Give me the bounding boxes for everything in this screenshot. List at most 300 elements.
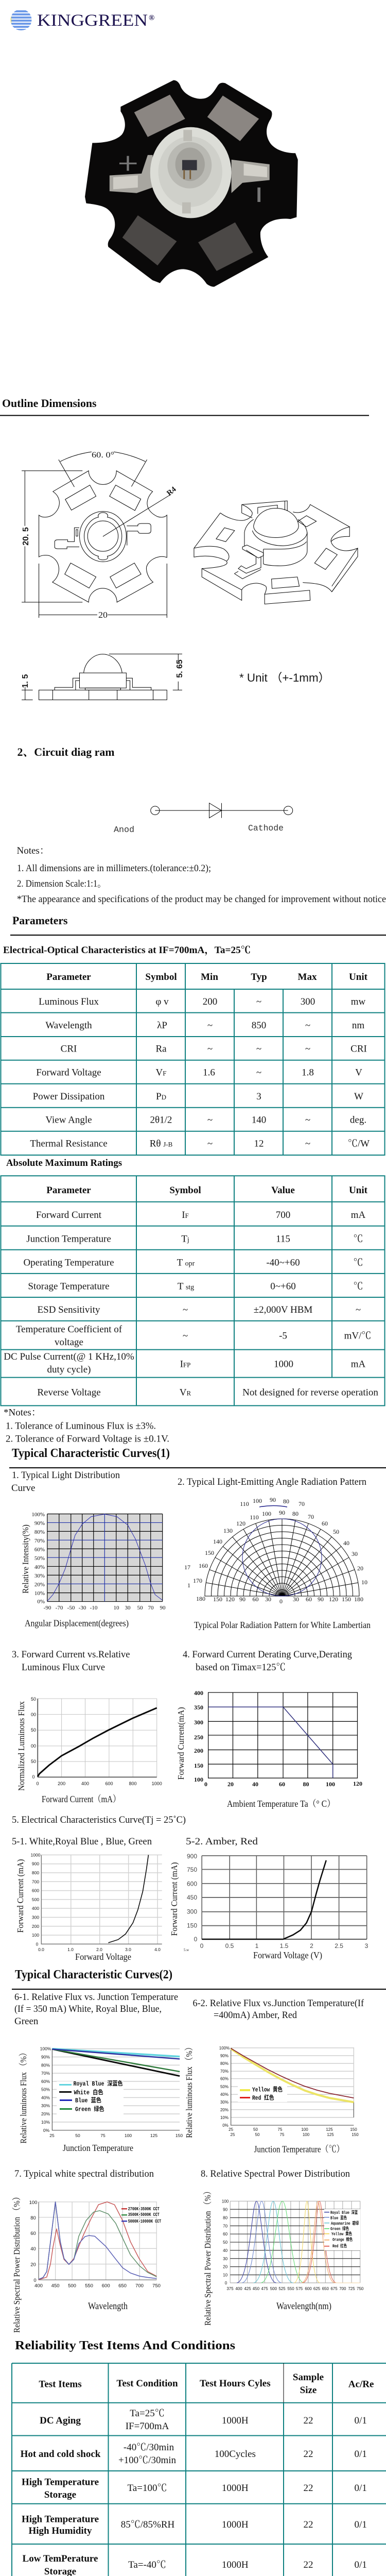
- angle labels: 60: [252, 1596, 258, 1603]
- data rows: 200: [203, 996, 217, 1007]
- data rows: Ta=100℃: [128, 2483, 167, 2494]
- axis labels: 125: [150, 2133, 157, 2138]
- axis labels: 100: [32, 1933, 39, 1938]
- axis labels: 1: [255, 1942, 259, 1950]
- axis labels: 80: [223, 2215, 228, 2221]
- axis labels: 0%: [43, 2128, 50, 2133]
- data rows: ~: [256, 1044, 261, 1055]
- axis labels: 0: [204, 1781, 207, 1788]
- legend: [57, 2079, 124, 2114]
- axis labels: 400: [235, 2286, 242, 2291]
- table: absolute maximum ratings: [1, 1176, 385, 1405]
- header row: Parameter: [46, 972, 91, 982]
- axis labels: 300: [187, 1908, 197, 1916]
- angle labels: 30: [352, 1550, 358, 1557]
- angle labels: 10: [361, 1579, 367, 1586]
- axis labels: 80%: [41, 2062, 50, 2067]
- axis labels: 10: [113, 1605, 119, 1611]
- subheading: absolute maximum ratings: Absolute Maximum Ratings: [6, 1158, 122, 1168]
- title: 7. Typical white spectral distribution: [14, 2168, 154, 2179]
- axis labels: 80%: [34, 1529, 45, 1535]
- axis labels: 0%: [222, 2123, 229, 2128]
- angle labels: 60: [322, 1520, 328, 1527]
- axis labels: 750: [152, 2283, 161, 2289]
- data rows: High Temperature: [22, 2514, 99, 2524]
- axis labels: 100: [125, 2133, 132, 2138]
- title: 4. Forward Current Derating Curve,Derating: [183, 1649, 352, 1660]
- panel: 4 derating curve: [176, 1649, 362, 1809]
- axis labels: 100%: [31, 1512, 45, 1518]
- data rows: View Angle: [45, 1115, 92, 1126]
- polar chart: [205, 1505, 359, 1596]
- axis labels: 1000: [31, 1853, 41, 1858]
- axis labels: 125: [326, 2127, 333, 2132]
- axis labels: 30: [223, 2257, 228, 2261]
- data rows: IF=700mA: [126, 2421, 169, 2432]
- data rows: +100℃/30min: [118, 2455, 177, 2466]
- data rows: ~: [356, 1304, 361, 1315]
- title: based on Timax=125℃: [196, 1662, 286, 1673]
- axis labels: 500: [270, 2286, 277, 2291]
- data rows: ~: [305, 1044, 310, 1055]
- axis labels: 400: [81, 1781, 89, 1786]
- axis labels: 150: [350, 2127, 357, 2132]
- data rows: 2θ1/2: [150, 1115, 172, 1126]
- axis labels: 2: [310, 1942, 313, 1950]
- technical drawing: top view: [22, 451, 178, 620]
- axis labels: 70%: [220, 2069, 229, 2074]
- data rows: φ v: [155, 996, 169, 1007]
- registered mark: ®: [149, 14, 154, 22]
- axis labels: 2.0: [96, 1947, 102, 1952]
- axis labels: 250: [194, 1734, 203, 1741]
- data rows: ~: [183, 1304, 188, 1315]
- data rows: PD: [156, 1091, 166, 1102]
- panel: 6-2 relative flux amber red: [184, 1998, 364, 2155]
- data rows: 140: [252, 1115, 266, 1126]
- axis labels: 150: [176, 2133, 183, 2138]
- axis labels: 625: [313, 2286, 321, 2291]
- axis labels: 300: [32, 1914, 39, 1920]
- axis labels: 700: [339, 2286, 346, 2291]
- x axis title: Junction Temperature（℃）: [254, 2144, 344, 2155]
- data rows: IF: [182, 1210, 189, 1221]
- data rows: λP: [157, 1020, 167, 1031]
- data rows: Operating Temperature: [23, 1257, 114, 1268]
- data rows: 700: [276, 1210, 290, 1221]
- axis labels: 40: [252, 1781, 258, 1788]
- data rows: 850: [252, 1020, 266, 1031]
- heading: Outline Dimensions: Outline Dimensions: [2, 397, 97, 410]
- axis labels: 20%: [41, 2111, 50, 2116]
- axis labels: 25: [231, 2132, 235, 2137]
- data rows: ~: [207, 1139, 213, 1149]
- line chart: [47, 1514, 163, 1602]
- axis labels: 150: [194, 1762, 203, 1769]
- axis labels: 550: [287, 2286, 294, 2291]
- data rows: ±2,000V HBM: [254, 1304, 312, 1315]
- dimension labels: 1. 5: [21, 674, 30, 688]
- angle labels: 110: [240, 1500, 249, 1507]
- axis labels: 70%: [41, 2071, 50, 2076]
- axis labels: 50: [75, 2133, 80, 2138]
- title: 2. Typical Light-Emitting Angle Radiation Pattern: [178, 1477, 366, 1487]
- data rows: ~: [256, 996, 261, 1007]
- data rows: ℃/W: [348, 1139, 370, 1149]
- y axis title: Relative Spectral Power Distribution （%）: [203, 2187, 213, 2326]
- axis labels: 400: [34, 2283, 43, 2289]
- header row: Min: [201, 972, 218, 982]
- LED housing and lens: [150, 127, 232, 218]
- data rows: 0/1: [355, 2519, 367, 2530]
- angle labels: 80: [283, 1498, 289, 1505]
- data rows: Temperature Coefficient of: [16, 1324, 122, 1335]
- axis labels: 70%: [34, 1538, 45, 1544]
- heading: typical characteristic curves 2: Typical Characteristic Curves(2): [15, 1968, 172, 1981]
- notes: [16, 845, 386, 905]
- title: Curve: [11, 1483, 35, 1494]
- angle labels: 110: [250, 1514, 259, 1521]
- axis labels: [31, 1697, 162, 1786]
- axis labels: 675: [330, 2286, 338, 2291]
- header row: Test Items: [39, 2379, 82, 2389]
- axis labels: 0: [36, 1781, 39, 1786]
- data rows: nm: [352, 1020, 364, 1031]
- notes: tolerances: 1. Tolerance of Luminous Flux is ±3%.: [6, 1420, 156, 1431]
- axis labels: 900: [32, 1861, 39, 1867]
- technical drawing: 3D view: [194, 501, 358, 604]
- data rows: Ra: [155, 1044, 167, 1055]
- line chart: [52, 2049, 180, 2130]
- legend: 5000K-10000K CCT: [128, 2219, 162, 2224]
- header row: Ac/Re: [348, 2379, 374, 2389]
- data rows: Hot and cold shock: [21, 2449, 101, 2460]
- data rows: Low TemPerature: [23, 2553, 98, 2564]
- axis labels: 600: [105, 1781, 113, 1786]
- data rows: 85℃/85%RH: [121, 2519, 175, 2530]
- data rows: ESD Sensitivity: [38, 1304, 100, 1315]
- data rows: CRI: [61, 1044, 77, 1055]
- x axis title: Forward Voltage (V): [253, 1950, 322, 1961]
- data rows: 0/1: [355, 2449, 367, 2460]
- y axis title: Relative Spectral Power Distribution （%）: [12, 2193, 22, 2333]
- title: Green: [14, 2016, 39, 2027]
- line chart: [202, 1856, 367, 1939]
- legend: White 白色: [74, 2088, 103, 2096]
- data rows: ~: [207, 1115, 213, 1126]
- panel: 8 relative spectral power distribution: [201, 2168, 364, 2326]
- data rows: Tj: [181, 1234, 189, 1245]
- data rows: 100Cycles: [215, 2449, 256, 2460]
- angle labels: 170: [193, 1577, 202, 1584]
- data rows: 0/1: [355, 2483, 367, 2494]
- legend: Green 绿色: [330, 2226, 349, 2232]
- data rows: 0/1: [355, 2415, 367, 2426]
- axis labels: 100: [222, 2199, 229, 2204]
- axis labels: 90%: [220, 2054, 229, 2058]
- axis labels: -10: [90, 1605, 98, 1611]
- angle labels: 130: [223, 1527, 233, 1534]
- axis labels: 150: [187, 1922, 197, 1929]
- axis labels: 350: [194, 1704, 203, 1711]
- axis labels: 100: [303, 2132, 310, 2137]
- notes: 2. Dimension Scale:1:1。: [17, 878, 106, 889]
- data rows: 1.6: [203, 1067, 215, 1078]
- data rows: mA: [351, 1210, 366, 1221]
- axis labels: 600: [187, 1880, 197, 1888]
- table: electrical-optical characteristics: [1, 963, 385, 1155]
- header row: Unit: [349, 1185, 368, 1196]
- data rows: Storage Temperature: [28, 1281, 110, 1292]
- axis labels: 90: [160, 1605, 166, 1611]
- axis labels: 10%: [220, 2115, 229, 2120]
- title: 6-1. Relative Flux vs. Junction Temperature: [14, 1992, 178, 2003]
- header row: Max: [298, 972, 317, 982]
- angle labels: 0: [279, 1598, 283, 1605]
- data rows: Rθ J-B: [150, 1139, 173, 1149]
- axis labels: 725: [348, 2286, 355, 2291]
- data rows: 115: [276, 1234, 290, 1245]
- axis labels: 90%: [41, 2055, 50, 2060]
- data rows: ℃: [353, 1281, 363, 1292]
- angle labels: 50: [333, 1528, 339, 1535]
- dimension labels: [21, 659, 184, 688]
- axis labels: 300: [194, 1719, 203, 1726]
- axis labels: 10%: [41, 2120, 50, 2125]
- axis labels: 0: [200, 1942, 204, 1950]
- data rows: ~: [207, 1044, 213, 1055]
- star PCB: [85, 80, 298, 287]
- data rows: 1000H: [222, 2560, 249, 2570]
- title: [192, 1998, 364, 2021]
- line chart: [231, 2048, 354, 2125]
- axis labels: 525: [278, 2286, 286, 2291]
- axis labels: 50: [223, 2240, 228, 2245]
- axis labels: [184, 1853, 369, 1952]
- data rows: DC Aging: [40, 2415, 81, 2426]
- data rows: 22: [304, 2483, 313, 2494]
- axis labels: 25: [49, 2133, 55, 2138]
- cathode label: Cathode: [248, 824, 284, 834]
- x axis title: Junction Temperature: [63, 2143, 133, 2153]
- header row: [46, 1185, 368, 1196]
- header row: Parameter: [46, 1185, 91, 1196]
- angle labels: 30: [265, 1596, 271, 1603]
- axis labels: [40, 2046, 183, 2138]
- axis labels: 125: [327, 2132, 334, 2137]
- header row: [39, 2372, 374, 2396]
- data rows: Ta=-40℃: [128, 2560, 166, 2570]
- angle labels: 100: [262, 1510, 271, 1517]
- data rows: W: [354, 1091, 363, 1102]
- axis labels: 425: [244, 2286, 251, 2291]
- legend: Royal Blue 深蓝色: [73, 2079, 122, 2088]
- axis labels: 0.5: [225, 1942, 234, 1950]
- axis labels: 0.0: [38, 1947, 44, 1952]
- y axis title: Normalized Luminous Flux: [16, 1701, 26, 1791]
- dimension labels: 20. 5: [22, 527, 30, 546]
- y axis title: Relative Intensity(%): [21, 1524, 30, 1594]
- panel: 5-1 white, royal blue, blue, green: [12, 1836, 162, 1962]
- axis labels: 100: [301, 2127, 308, 2132]
- axis labels: 10: [223, 2273, 228, 2277]
- axis labels: 500: [32, 1897, 39, 1902]
- angle labels: 180: [196, 1595, 205, 1602]
- axis labels: 100%: [40, 2046, 51, 2052]
- y axis title: Forward Current(mA): [176, 1707, 186, 1780]
- panel: 3 forward current vs flux: [12, 1649, 162, 1804]
- axis labels: 1.0: [67, 1947, 74, 1952]
- axis labels: 650: [118, 2283, 127, 2289]
- axis labels: 5.w: [184, 1948, 189, 1952]
- data rows: High Humidity: [29, 2526, 92, 2536]
- header row: Test Condition: [116, 2378, 178, 2389]
- axis labels: 500: [68, 2283, 76, 2289]
- notes: tolerances: [4, 1408, 169, 1445]
- legend: Blue 蓝色: [75, 2096, 101, 2104]
- angle labels: 90: [318, 1596, 324, 1603]
- axis labels: 750: [187, 1866, 197, 1873]
- axis labels: 100: [326, 1781, 335, 1788]
- product photo: LED on star PCB: [85, 80, 298, 287]
- axis labels: -50: [67, 1605, 75, 1611]
- angle labels: 150: [205, 1549, 214, 1556]
- axis labels: 20: [223, 2265, 228, 2269]
- axis labels: 1000: [152, 1781, 162, 1786]
- angle labels: 140: [213, 1538, 222, 1545]
- angle labels: 20: [357, 1565, 363, 1572]
- axis labels: 3: [365, 1942, 369, 1950]
- angle labels: [184, 1496, 367, 1605]
- axis labels: 70: [148, 1605, 154, 1611]
- title: 3. Forward Current vs.Relative: [12, 1649, 130, 1660]
- data rows: Storage: [44, 2489, 76, 2500]
- data rows: Wavelength: [45, 1020, 92, 1031]
- y axis title: Forward Current (mA): [15, 1859, 25, 1933]
- polarity marks: [119, 156, 260, 202]
- axis labels: 3.0: [125, 1947, 131, 1952]
- header row: Typ: [251, 972, 267, 982]
- data rows: mw: [351, 996, 366, 1007]
- legend: [324, 2209, 360, 2250]
- header row: Value: [271, 1185, 295, 1196]
- data rows: 12: [254, 1139, 264, 1149]
- notes: Notes：: [16, 845, 49, 856]
- axis labels: 60: [30, 2231, 36, 2236]
- angle labels: 120: [236, 1520, 245, 1527]
- panel: 5-2 amber, red: [169, 1836, 369, 1961]
- legend: Orange 橙色: [332, 2237, 353, 2242]
- title: 5-2. Amber, Red: [186, 1836, 258, 1847]
- data rows: DC Pulse Current(@ 1 KHz,10%: [4, 1351, 134, 1362]
- data rows: 300: [301, 996, 315, 1007]
- angle labels: 180: [354, 1596, 363, 1603]
- title: 8. Relative Spectral Power Distribution: [201, 2168, 350, 2179]
- data rows: 22: [304, 2519, 313, 2530]
- axis labels: 900: [187, 1853, 197, 1860]
- axis labels: 375: [226, 2286, 234, 2291]
- axis labels: 00: [31, 1743, 36, 1749]
- title: =400mA) Amber, Red: [214, 2010, 297, 2021]
- data rows: High Temperature: [22, 2477, 99, 2487]
- data rows: T stg: [178, 1281, 194, 1292]
- axis labels: 75: [278, 2127, 283, 2132]
- data rows: Power Dissipation: [33, 1091, 105, 1102]
- data rows: ~: [305, 1139, 310, 1149]
- axis labels: 0: [32, 1774, 35, 1780]
- x axis title: Forward Voltage: [75, 1952, 131, 1962]
- axis labels: 0: [36, 1941, 39, 1946]
- data rows: 1000H: [222, 2519, 249, 2530]
- data rows: ~: [256, 1067, 261, 1078]
- axis labels: 50: [31, 1697, 36, 1702]
- data rows: Luminous Flux: [39, 996, 99, 1007]
- unit note: * Unit （+-1mm）: [239, 671, 330, 684]
- data rows: voltage: [55, 1337, 83, 1348]
- angle labels: 120: [329, 1596, 338, 1603]
- data rows: Not designed for reverse operation: [242, 1387, 378, 1398]
- title: 1. Typical Light Distribution: [12, 1470, 120, 1481]
- y axis title: Relative luminous Flux （%）: [184, 2043, 194, 2138]
- angle labels: 17: [184, 1564, 190, 1571]
- axis labels: 600: [32, 1888, 39, 1893]
- leads: [110, 155, 270, 193]
- data rows: [21, 2408, 367, 2576]
- legend: Red 红色: [332, 2243, 347, 2249]
- axis labels: 20%: [220, 2108, 229, 2112]
- axis labels: 50: [137, 1605, 143, 1611]
- axis labels: 50%: [220, 2084, 229, 2089]
- angle labels: 90: [279, 1509, 285, 1516]
- x axis title: Forward Current（mA）: [42, 1794, 120, 1804]
- title: [14, 1992, 178, 2027]
- data rows: 1000: [274, 1359, 293, 1369]
- header row: Symbol: [145, 972, 177, 982]
- axis labels: 20: [227, 1781, 234, 1788]
- data rows: duty cycle): [47, 1364, 91, 1375]
- panel: 1 light distribution curve: [11, 1470, 166, 1629]
- heading: circuit diagram: 2、Circuit diag ram: [17, 745, 114, 758]
- title: 6-2. Relative Flux vs.Junction Temperature(If: [192, 1998, 364, 2009]
- data rows: ~: [305, 1020, 310, 1031]
- axis labels: 100%: [219, 2046, 230, 2050]
- axis labels: 60%: [220, 2077, 229, 2081]
- header row: [46, 972, 368, 982]
- axis labels: 200: [58, 1781, 65, 1786]
- axis labels: 30%: [41, 2103, 50, 2108]
- legend: Blue 蓝色: [330, 2215, 347, 2221]
- axis labels: 70: [223, 2224, 228, 2228]
- data rows: Reverse Voltage: [37, 1387, 101, 1398]
- legend: Yellow 黄色: [252, 2086, 283, 2094]
- angle labels: 160: [199, 1562, 208, 1569]
- axis labels: 750: [357, 2286, 364, 2291]
- axis labels: 600: [305, 2286, 312, 2291]
- data rows: [4, 1210, 378, 1398]
- panel: 6-1 relative flux vs junction temperature: [14, 1992, 183, 2153]
- axis labels: 60%: [34, 1547, 45, 1553]
- data rows: -5: [279, 1331, 287, 1342]
- axis labels: 600: [102, 2283, 110, 2289]
- legend: Green 绿色: [75, 2105, 104, 2113]
- axis labels: 700: [135, 2283, 144, 2289]
- axis labels: 400: [32, 1906, 39, 1911]
- axis labels: [222, 2199, 364, 2291]
- angle labels: 120: [225, 1596, 235, 1603]
- axis labels: 800: [129, 1781, 137, 1786]
- dimension labels: 60. 0°: [92, 451, 114, 460]
- axis labels: 00: [31, 1712, 36, 1717]
